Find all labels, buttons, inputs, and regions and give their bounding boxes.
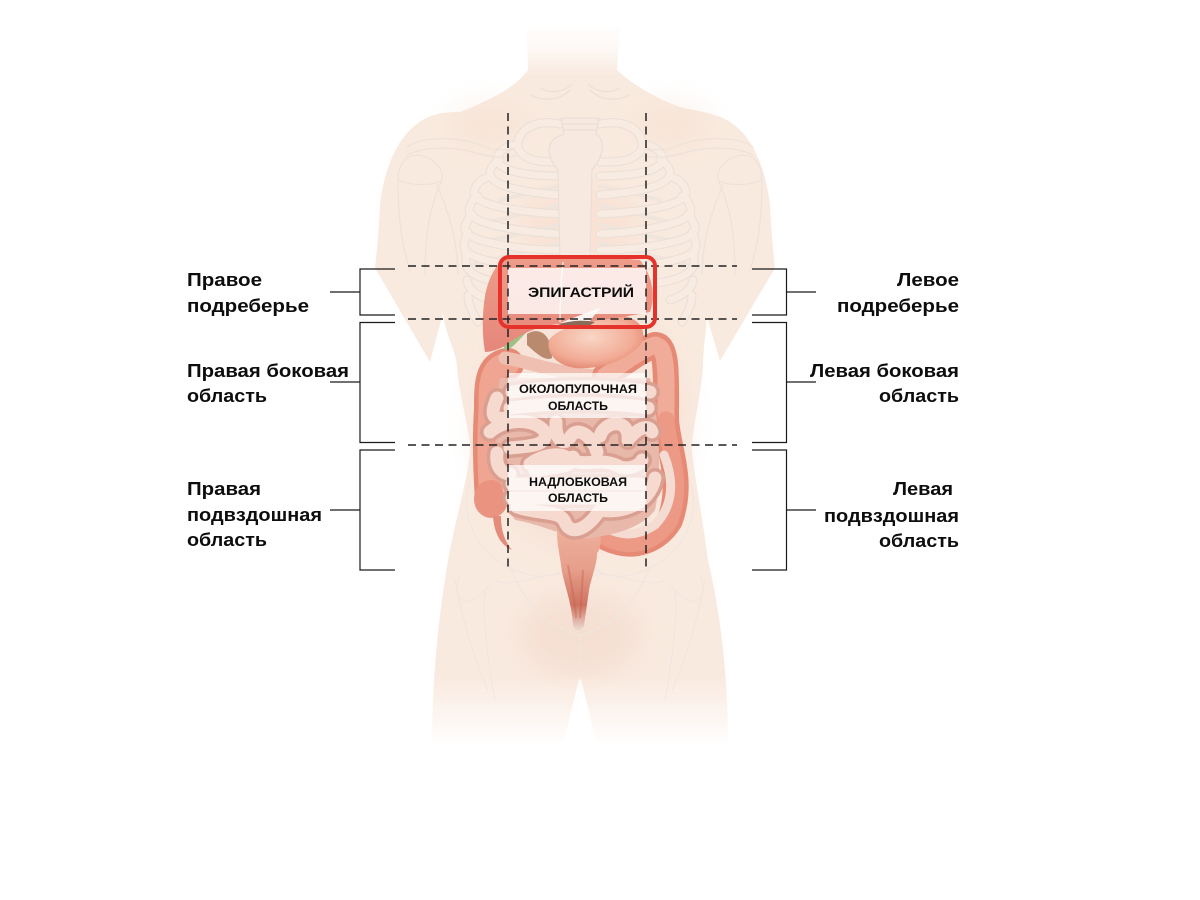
label: Правая подвздошная область: Правая [187,479,261,499]
label: Левая боковая область: область [879,386,959,406]
label: Правое подреберье [187,270,309,316]
organ: stomach [548,316,643,368]
label: Левая боковая область: Левая боковая [810,361,959,381]
organ: cecum [474,480,508,518]
organ: small intestine [490,378,659,538]
label: Левая подвздошная область: подвздошная [824,506,959,526]
organ: gallbladder [503,330,527,350]
label: Левая подвздошная область: область [879,531,959,551]
label: Околопупочная область: ОКОЛОПУПОЧНАЯ [519,382,637,396]
organ: colon [489,345,676,544]
organ: rectum [557,529,601,630]
label: Эпигастрий region: ЭПИГАСТРИЙ [528,283,634,300]
label: Правое подреберье: подреберье [187,296,309,316]
label: Надлобковая область: ОБЛАСТЬ [548,491,608,505]
label: Эпигастрий region [508,268,646,314]
label: Надлобковая область [508,465,646,511]
body silhouette [375,28,775,745]
label: Правая боковая область: область [187,386,267,406]
highlight: red epigastrium frame [500,257,655,327]
brackets: right side [752,269,816,570]
label: Левая подвздошная область: Левая [893,479,953,499]
brackets: left side [330,269,395,570]
organ: pancreas [527,331,552,359]
dashed grid lines [408,113,737,570]
label: Правая подвздошная область: подвздошная [187,505,322,525]
organ: appendix [493,516,512,550]
label: Левое подреберье: Левое [897,270,959,290]
label: Околопупочная область [508,373,646,418]
organ: liver [483,256,653,352]
label: Левое подреберье: подреберье [837,296,959,316]
skeleton: ribs, sternum, clavicles, pelvis [398,84,762,700]
label: Правая подвздошная область [187,479,322,550]
label: Околопупочная область: ОБЛАСТЬ [548,399,608,413]
organs: digestive system [474,256,676,630]
label: Правая подвздошная область: область [187,530,267,550]
label: Правая боковая область: Правая боковая [187,361,349,381]
label: Левая боковая область [810,361,959,406]
label: Левая подвздошная область [824,479,959,551]
label: Правая боковая область [187,361,349,406]
label: Левое подреберье [837,270,959,316]
label: Правое подреберье: Правое [187,270,262,290]
label: Надлобковая область: НАДЛОБКОВАЯ [529,475,627,489]
